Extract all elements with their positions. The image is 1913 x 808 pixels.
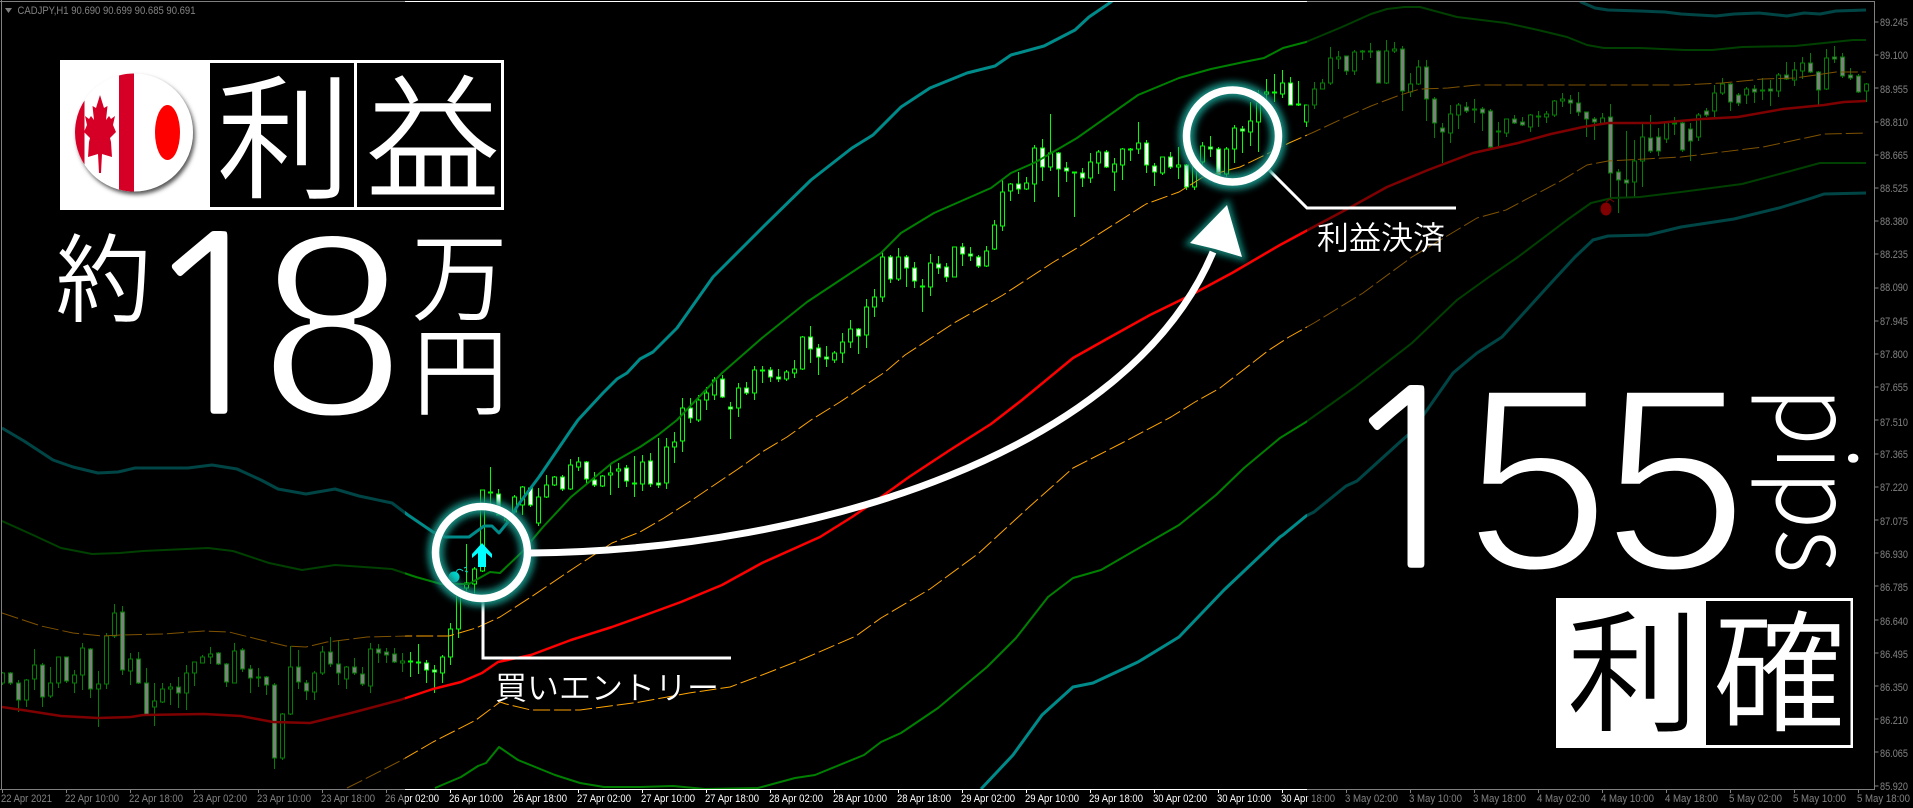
price axis labels: 87.510 xyxy=(1880,417,1908,429)
time axis labels: 3 May 02:00 xyxy=(1345,793,1398,805)
time axis labels: 29 Apr 02:00 xyxy=(961,793,1015,805)
panel: 利確 xyxy=(1556,598,1853,749)
price axis labels: 88.235 xyxy=(1880,249,1908,261)
price axis labels: 86.640 xyxy=(1880,616,1908,628)
price axis labels: 87.075 xyxy=(1880,516,1908,528)
panel: 利益 title with flag xyxy=(60,60,504,217)
time axis labels: 3 May 10:00 xyxy=(1409,793,1462,805)
time axis labels: 22 Apr 10:00 xyxy=(65,793,119,805)
time axis labels: 22 Apr 2021 xyxy=(1,793,52,805)
panel background xyxy=(1556,598,1853,748)
time axis labels: 28 Apr 10:00 xyxy=(833,793,887,805)
price axis labels xyxy=(1880,17,1908,793)
icon: cyan buy arrow xyxy=(472,543,492,567)
profit amount: 約18万円 xyxy=(56,179,508,472)
heading: 益: 益 xyxy=(366,66,500,217)
time axis labels: 27 Apr 02:00 xyxy=(577,793,631,805)
dim overlay: left of the trade xyxy=(0,0,405,808)
symbol header: CADJPY,H1 90.690 90.699 90.685 90.691 xyxy=(18,5,196,17)
price axis labels: 87.365 xyxy=(1880,449,1908,461)
time axis labels: 5 May 02:00 xyxy=(1729,793,1782,805)
number 155: 1 xyxy=(1334,358,1482,603)
time axis labels: 23 Apr 02:00 xyxy=(193,793,247,805)
time axis labels: 30 Apr 02:00 xyxy=(1153,793,1207,805)
number 18: 1 xyxy=(137,204,285,449)
price axis labels: 88.090 xyxy=(1880,282,1908,294)
price axis labels: 87.800 xyxy=(1880,349,1908,361)
price axis labels: 88.955 xyxy=(1880,84,1908,96)
price axis labels: 88.380 xyxy=(1880,216,1908,228)
price axis labels: 85.920 xyxy=(1880,781,1908,793)
number 18: 8 xyxy=(260,179,405,472)
time axis labels: 30 Apr 10:00 xyxy=(1217,793,1271,805)
result: 155 pips xyxy=(1334,333,1901,626)
price axis labels: 87.655 xyxy=(1880,382,1908,394)
icon: CAD and JPY flag disc xyxy=(70,70,193,195)
price axis labels: 86.065 xyxy=(1880,748,1908,760)
price axis labels: 86.350 xyxy=(1880,682,1908,694)
marker: entry circle xyxy=(436,506,528,598)
box: 確 xyxy=(1706,601,1850,745)
price axis labels: 88.525 xyxy=(1880,183,1908,195)
time axis labels: 22 Apr 18:00 xyxy=(129,793,183,805)
box: 益 xyxy=(357,63,501,207)
time axis labels: 27 Apr 10:00 xyxy=(641,793,695,805)
time axis labels: 4 May 10:00 xyxy=(1601,793,1654,805)
price axis labels: 87.945 xyxy=(1880,316,1908,328)
panel background xyxy=(60,60,504,210)
time axis labels xyxy=(1,793,1910,805)
price axis labels: 88.810 xyxy=(1880,117,1908,129)
price axis labels: 88.665 xyxy=(1880,150,1908,162)
time axis labels: 23 Apr 10:00 xyxy=(257,793,311,805)
time axis labels: 4 May 02:00 xyxy=(1537,793,1590,805)
dim overlay: right of the trade xyxy=(1307,0,1913,808)
time axis labels: 29 Apr 18:00 xyxy=(1089,793,1143,805)
約: 約 xyxy=(56,228,152,335)
time axis labels: 27 Apr 18:00 xyxy=(705,793,759,805)
heading: 利: 利 xyxy=(216,66,352,217)
number 155: 55 xyxy=(1464,333,1748,626)
unit: pips rotated: pips xyxy=(1745,387,1901,573)
万: 万 xyxy=(412,227,508,334)
arrow: entry to exit xyxy=(531,205,1242,553)
price axis labels: 87.220 xyxy=(1880,482,1908,494)
円: 円 xyxy=(412,321,508,428)
time axis labels: 26 Apr 02:00 xyxy=(385,793,439,805)
time axis labels: 30 Apr 18:00 xyxy=(1281,793,1335,805)
callout: exit leader line xyxy=(1267,168,1456,208)
price axis labels: 89.100 xyxy=(1880,50,1908,62)
time axis labels: 26 Apr 18:00 xyxy=(513,793,567,805)
icon: bomb signal xyxy=(448,567,468,582)
time axis labels: 23 Apr 18:00 xyxy=(321,793,375,805)
heading: 確: 確 xyxy=(1714,602,1846,749)
price axis labels: 86.210 xyxy=(1880,715,1908,727)
callout label: 利益決済: 利益決済 xyxy=(1317,220,1445,256)
time axis labels: 28 Apr 18:00 xyxy=(897,793,951,805)
callout: entry leader line xyxy=(483,600,731,658)
price axis labels: 86.785 xyxy=(1880,582,1908,594)
marker: exit circle xyxy=(1186,90,1278,182)
time axis labels: 4 May 18:00 xyxy=(1665,793,1718,805)
price axis labels: 86.495 xyxy=(1880,649,1908,661)
heading: 利: 利 xyxy=(1567,602,1699,749)
time axis labels: 3 May 18:00 xyxy=(1473,793,1526,805)
price axis labels: 86.930 xyxy=(1880,549,1908,561)
box: 利 xyxy=(210,63,354,207)
time axis labels: 29 Apr 10:00 xyxy=(1025,793,1079,805)
time axis labels: 26 Apr 10:00 xyxy=(449,793,503,805)
time axis labels: 5 May 10:00 xyxy=(1793,793,1846,805)
time axis labels: 28 Apr 02:00 xyxy=(769,793,823,805)
bomb marker: sell signal xyxy=(1600,199,1614,216)
callout label: 買いエントリー: 買いエントリー xyxy=(495,670,719,706)
price axis labels: 89.245 xyxy=(1880,17,1908,29)
